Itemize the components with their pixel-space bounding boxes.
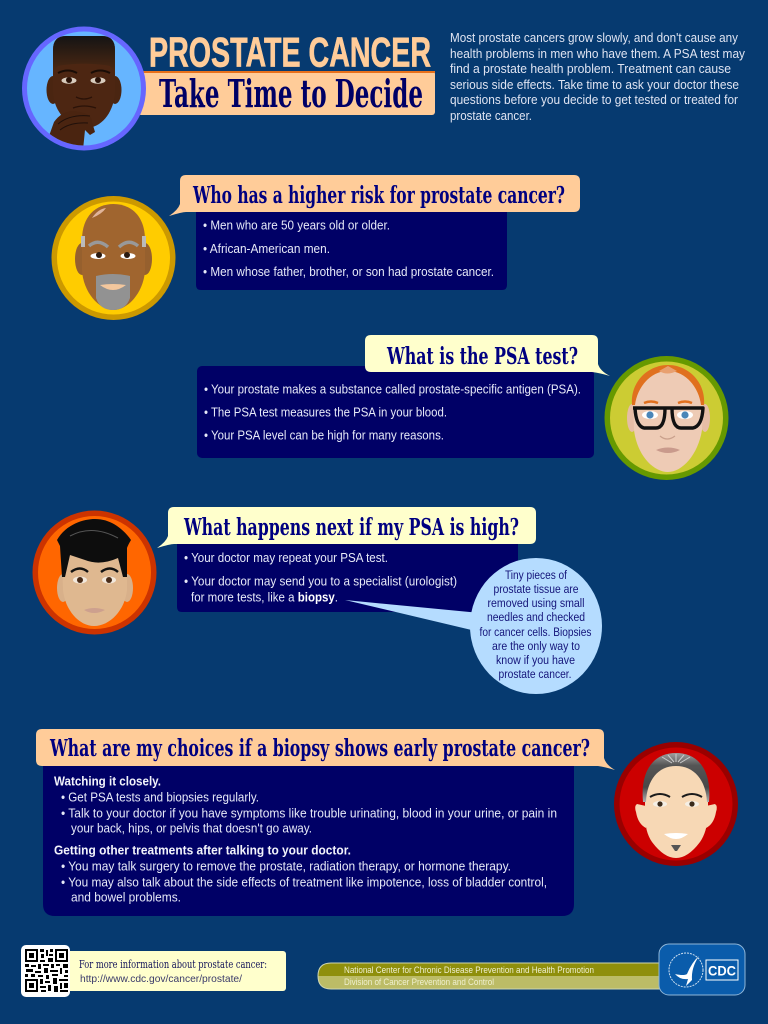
- answer panel: • Men whose father, brother, or son had prostate cancer.: [203, 264, 494, 279]
- answer panel: • Your doctor may send you to a specialist (urologist): [184, 574, 457, 588]
- section 4: choices: [36, 729, 738, 916]
- callout: biopsy explanation: Tiny pieces of: [505, 568, 567, 582]
- portrait: bald older man with gray beard: [52, 196, 176, 320]
- answer panel: • Talk to your doctor if you have symptoms like trouble urinating, blood in your urine, or pain in: [61, 806, 557, 820]
- portrait: man with black hair: [32, 510, 156, 634]
- intro text: find a prostate health problem. Treatment can cause: [450, 61, 731, 76]
- answer panel: [43, 766, 574, 916]
- callout: biopsy explanation: for cancer cells. Biopsies: [480, 625, 592, 639]
- answer panel: Getting other treatments after talking to your doctor.: [54, 842, 351, 858]
- question bubble: Who has a higher risk for prostate cancer?: [192, 181, 565, 209]
- answer panel: • Your prostate makes a substance called prostate-specific antigen (PSA).: [204, 382, 581, 396]
- answer panel: for more tests, like a biopsy.: [191, 590, 338, 604]
- footer: more information box: For more information about prostate cancer:: [79, 957, 267, 971]
- section 1: risk: [52, 175, 580, 320]
- callout: biopsy explanation: needles and checked: [487, 610, 585, 624]
- portrait: man with glasses: [604, 356, 728, 480]
- intro text: questions before you decide to get tested or treated for: [450, 92, 739, 107]
- answer panel: • Your PSA level can be high for many reasons.: [204, 428, 444, 442]
- answer panel: [197, 366, 594, 458]
- logo: HHS and CDC: CDC: [708, 962, 736, 978]
- footer: agency bar: [318, 963, 664, 989]
- intro text: Most prostate cancers grow slowly, and don't cause any: [450, 30, 739, 45]
- footer: agency bar: National Center for Chronic Disease Prevention and Health Promotion: [344, 965, 594, 975]
- question bubble: [365, 335, 610, 376]
- answer panel: Watching it closely.: [54, 774, 161, 788]
- question bubble: [169, 175, 580, 216]
- question bubble: What is the PSA test?: [386, 342, 578, 370]
- footer: more information box: [66, 951, 286, 991]
- answer panel: [177, 544, 518, 612]
- callout: biopsy explanation: prostate tissue are: [494, 582, 579, 596]
- footer: agency bar: Division of Cancer Prevention and Control: [344, 977, 494, 987]
- question bubble: [36, 729, 615, 770]
- intro text: [450, 30, 746, 123]
- callout: biopsy explanation: removed using small: [488, 596, 584, 610]
- portrait: man with gray hair and goatee: [614, 742, 738, 866]
- title: PROSTATE CANCER: [149, 28, 431, 76]
- callout: biopsy explanation: [345, 558, 602, 694]
- section 2: PSA test: [197, 335, 728, 480]
- icon: QR code: [21, 945, 70, 997]
- answer panel: your back, hips, or pelvis that doesn't go away.: [71, 820, 312, 836]
- question bubble: [157, 507, 536, 548]
- callout: biopsy explanation: know if you have: [496, 653, 575, 667]
- answer panel: • You may talk surgery to remove the prostate, radiation therapy, or hormone therapy.: [61, 858, 511, 874]
- answer panel: • Men who are 50 years old or older.: [203, 218, 390, 232]
- answer panel: • African-American men.: [203, 241, 330, 256]
- answer panel: • Get PSA tests and biopsies regularly.: [61, 790, 259, 804]
- question bubble: What happens next if my PSA is high?: [183, 513, 519, 541]
- header banner: Take Time to Decide: [138, 71, 435, 116]
- answer panel: • Your doctor may repeat your PSA test.: [184, 550, 388, 565]
- callout: biopsy explanation: prostate cancer.: [498, 667, 572, 681]
- answer panel: [196, 212, 507, 290]
- header banner: Take Time to Decide: Take Time to Decide: [159, 71, 423, 116]
- answer panel: • The PSA test measures the PSA in your blood.: [204, 404, 447, 420]
- answer panel: • You may also talk about the side effects of treatment like impotence, loss of bladder control,: [61, 874, 547, 890]
- answer panel: and bowel problems.: [71, 890, 181, 904]
- portrait: thinking man: [22, 26, 146, 150]
- section 3: high PSA: [32, 507, 602, 694]
- footer: more information box: http://www.cdc.gov/cancer/prostate/: [80, 973, 242, 985]
- callout: biopsy explanation: are the only way to: [492, 639, 580, 653]
- logo: HHS and CDC: [659, 944, 745, 995]
- intro text: serious side effects. Take time to ask your doctor these: [450, 77, 739, 92]
- intro text: prostate cancer.: [450, 108, 532, 123]
- intro text: health problems in men who have them. A PSA test may: [450, 46, 746, 61]
